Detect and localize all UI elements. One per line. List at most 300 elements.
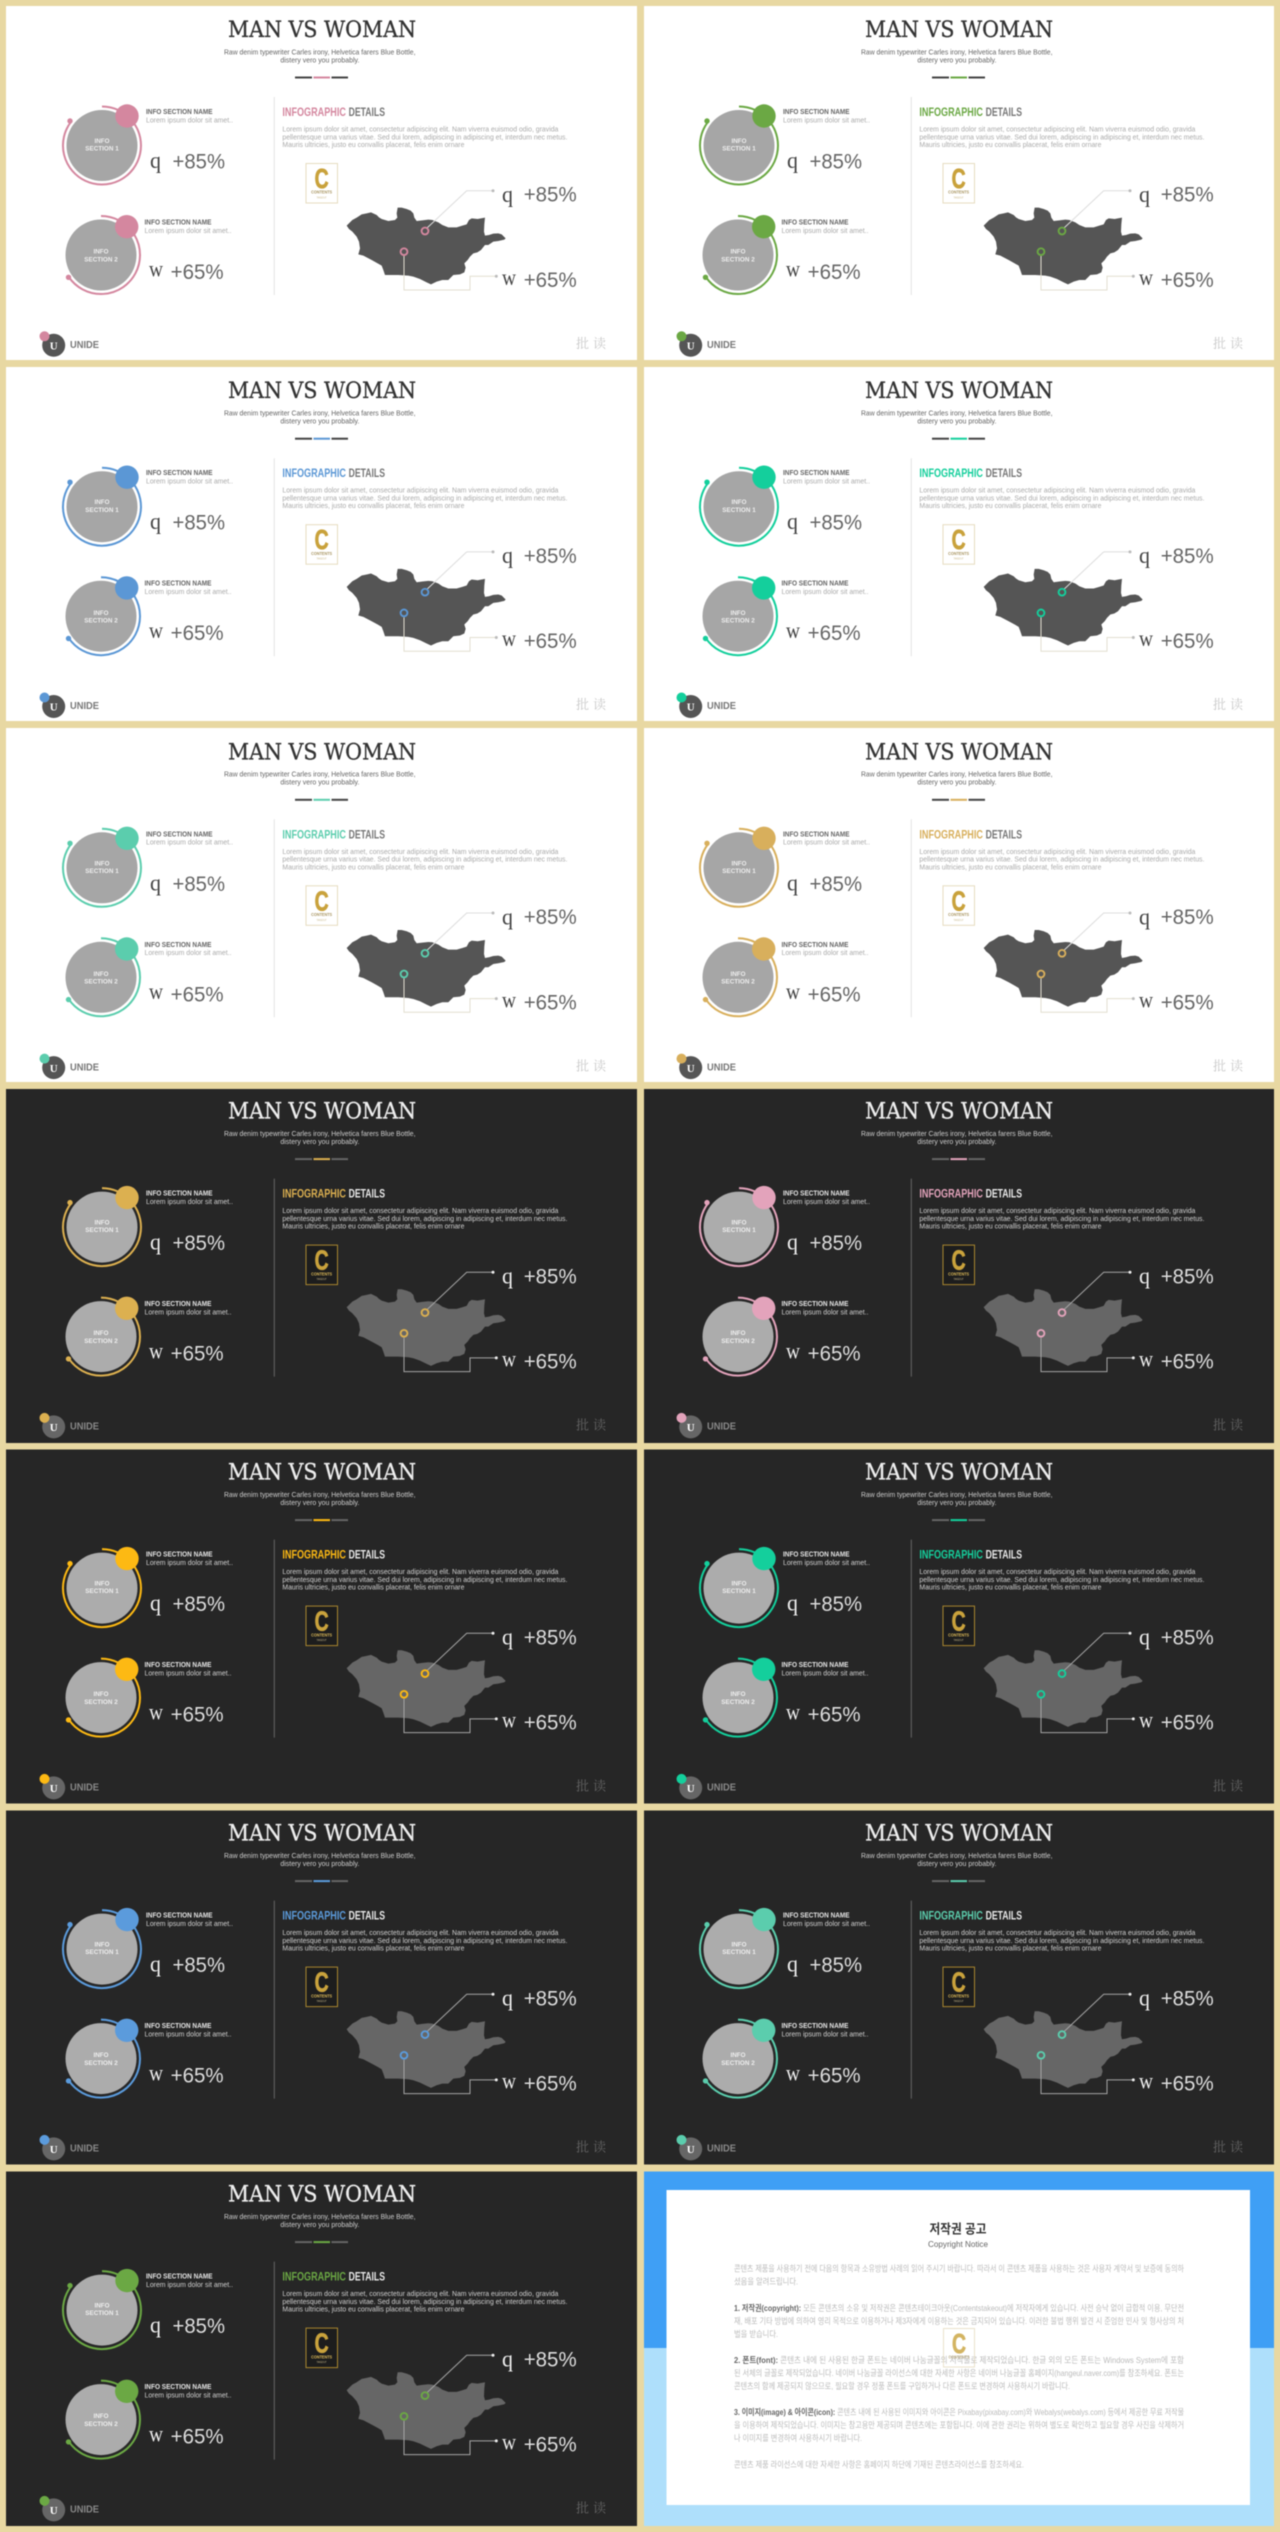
circle: info section 2: SECTION 2	[84, 1338, 118, 1345]
text: section 1 name: Lorem ipsum dolor sit amet..	[146, 838, 233, 847]
text: section 2 name	[782, 220, 868, 235]
stat: q +85%: q	[787, 148, 798, 173]
notice paragraph 1: 재, 배포 기타 방법에 의하여 영리 목적으로 이용하거나 제3자에게 이용하는 것은 금지되어 있습니다. 이러한 불법 행위 발견 시 준엄한 민사 및 형사상의 처	[734, 2316, 1184, 2326]
footer logo: unide: UNIDE	[70, 1783, 99, 1794]
map stat: w +65%: +65%	[524, 269, 577, 292]
panel: slide 9 yellow dark	[6, 1450, 637, 1804]
subtitle: Raw denim typewriter Carles irony, Helvetica farers Blue Bottle,	[861, 1490, 1052, 1499]
subtitle	[224, 770, 416, 787]
notice paragraph 1: 1. 저작권(copyright): 모든 콘텐츠의 소유 및 저작권은 콘텐츠테이크아웃(Contentstakeout)에 저작자에게 있습니다. 사전 승낙 없이 급합적 이용, 무단전	[734, 2303, 1184, 2313]
panel: slide 4 teal light	[644, 367, 1274, 721]
circle: info section 2	[66, 2380, 140, 2459]
circle: info section 2	[702, 576, 777, 655]
panel: slide 7 gold dark	[6, 1089, 637, 1443]
stat: q +85%: q	[787, 870, 798, 895]
body text	[919, 847, 1204, 871]
map with callouts	[347, 1271, 506, 1372]
map stat: w +65%: w	[1139, 1708, 1153, 1733]
heading: infographic details: DETAILS	[986, 1909, 1022, 1923]
circle: info section 2	[66, 215, 140, 294]
text: section 1 name: Lorem ipsum dolor sit amet..	[783, 115, 870, 124]
text: section 1 name	[783, 1552, 870, 1567]
subtitle: distery vero you probably.	[280, 1859, 359, 1868]
logo: contents: TAKEOUT	[954, 196, 964, 200]
subtitle: Raw denim typewriter Carles irony, Helvetica farers Blue Bottle,	[224, 47, 416, 56]
text: section 2 name	[782, 581, 868, 596]
stat: w +65%: +65%	[171, 2065, 224, 2088]
stat: w +65%: w	[786, 2060, 800, 2085]
divider bars	[295, 438, 348, 440]
footer glyphs: 批 读	[1213, 1415, 1243, 1434]
heading: infographic details: DETAILS	[986, 827, 1022, 841]
stat: q +85%	[150, 870, 225, 896]
map stat: w +65%: +65%	[524, 630, 577, 653]
circle: info section 1: SECTION 1	[722, 1588, 756, 1595]
circle: info section 2: SECTION 2	[721, 979, 755, 986]
notice paragraph 3: 3. 이미지(image) & 아이콘(icon): 콘텐츠 내에 된 사용된 이미지와 아이콘은 Pixabay(pixabay.com)와 Webalys(webalys.com) 등에서 제공한 무료 저작물	[734, 2407, 1184, 2417]
divider bars	[295, 799, 348, 801]
circle: info section 1: SECTION 1	[722, 868, 756, 875]
body text: Lorem ipsum dolor sit amet, consectetur adipiscing elit. Nam viverra euismod odio, gravida	[919, 847, 1195, 856]
stat: w +65%: w	[786, 1699, 800, 1724]
stat: w +65%: w	[149, 257, 163, 282]
stat: w +65%	[149, 2060, 224, 2088]
text: section 1 name: INFO SECTION NAME	[146, 1552, 213, 1559]
heading: infographic details: INFOGRAPHIC	[282, 105, 346, 119]
stat: w +65%: w	[149, 1699, 163, 1724]
stat: q +85%: q	[150, 148, 161, 173]
logo: contents: TAKEOUT	[317, 2360, 327, 2364]
body text	[919, 1567, 1204, 1592]
circle: info section 2: SECTION 2	[84, 1699, 118, 1706]
footer logo: unide: U	[687, 1422, 695, 1434]
circle: info section 1	[63, 466, 141, 546]
title: MAN VS WOMAN	[228, 2183, 416, 2208]
text: section 2 name: INFO SECTION NAME	[144, 581, 212, 588]
text: section 2 name	[782, 2023, 868, 2038]
footer logo: unide: UNIDE	[707, 340, 736, 351]
stat: w +65%: +65%	[808, 261, 861, 284]
footer logo: unide	[676, 692, 736, 718]
footer glyphs: 批 读	[1213, 1776, 1243, 1795]
subtitle: Raw denim typewriter Carles irony, Helvetica farers Blue Bottle,	[861, 409, 1052, 418]
body text: pellentesque urna varius vitae. Sed dui lorem, adipiscing in adipiscing et, interdum nec metus.	[919, 494, 1204, 503]
map with callouts	[984, 1271, 1143, 1372]
text: section 1 name	[783, 1191, 870, 1206]
text: section 1 name	[146, 1191, 233, 1206]
circle: info section 2	[66, 1658, 140, 1737]
map stat: w +65%	[502, 1347, 577, 1374]
circle: info section 2: INFO	[730, 1691, 746, 1698]
stat: q +85%	[787, 1591, 862, 1616]
circle: info section 2: SECTION 2	[84, 256, 118, 263]
logo: contents: CONTENTS	[311, 2354, 332, 2359]
heading: infographic details: INFOGRAPHIC	[919, 1909, 983, 1923]
circle: info section 2	[702, 1297, 777, 1376]
logo: contents	[943, 1606, 974, 1646]
circle: info section 2: SECTION 2	[721, 618, 755, 624]
logo: contents: C	[315, 163, 329, 194]
logo: contents: CONTENTS	[311, 1632, 332, 1637]
text: section 2 name: INFO SECTION NAME	[144, 1301, 212, 1308]
footer glyphs: 批 读	[1213, 333, 1243, 352]
stat: w +65%	[786, 2060, 861, 2088]
title: MAN VS WOMAN	[228, 1100, 416, 1125]
circle: info section 1: INFO	[94, 1581, 110, 1588]
map stat: q +85%: q	[1139, 904, 1150, 929]
panel: slide 1 pink light	[6, 6, 637, 360]
heading: infographic details: DETAILS	[349, 1909, 385, 1923]
circle: info section 2: SECTION 2	[84, 979, 118, 986]
title: MAN VS WOMAN	[865, 18, 1053, 43]
footer logo: unide: UNIDE	[70, 2505, 99, 2516]
footer logo: unide: UNIDE	[707, 701, 736, 712]
body text	[282, 847, 567, 871]
heading: infographic details: DETAILS	[986, 1187, 1022, 1201]
map stat: w +65%	[1139, 1708, 1214, 1735]
heading: infographic details: DETAILS	[986, 105, 1022, 119]
subtitle: Raw denim typewriter Carles irony, Helvetica farers Blue Bottle,	[224, 1490, 416, 1499]
heading: infographic details: INFOGRAPHIC	[282, 1187, 346, 1201]
text: section 2 name: Lorem ipsum dolor sit amet..	[782, 2029, 868, 2038]
text: section 2 name	[144, 2384, 232, 2399]
map stat: q +85%: +85%	[1161, 545, 1214, 568]
footer logo: unide: UNIDE	[707, 2144, 736, 2155]
text: section 1 name: INFO SECTION NAME	[783, 1913, 850, 1920]
body text: Mauris ultricies, justo eu convallis placerat, felis enim ornare	[919, 140, 1101, 149]
text: section 2 name: INFO SECTION NAME	[144, 220, 212, 226]
stat: w +65%: w	[786, 618, 800, 643]
panel: slide 13 green dark	[6, 2172, 637, 2526]
body text: pellentesque urna varius vitae. Sed dui lorem, adipiscing in adipiscing et, interdum nec metus.	[282, 1936, 567, 1945]
stat: q +85%: +85%	[172, 1593, 225, 1616]
circle: info section 1: SECTION 1	[85, 1227, 119, 1234]
map stat: w +65%: +65%	[524, 2434, 577, 2457]
footer glyphs: 批 读	[1213, 694, 1243, 713]
text: section 2 name	[782, 1662, 868, 1677]
logo: contents: CONTENTS	[948, 912, 969, 917]
footer glyphs: 批 读	[576, 694, 606, 713]
body text: Mauris ultricies, justo eu convallis placerat, felis enim ornare	[282, 862, 464, 871]
notice closing line: 콘텐츠 제품 라이선스에 대한 자세한 사항은 홈페이지 하단에 기재된 콘텐츠라이선스를 참조하세요.	[734, 2460, 1024, 2470]
logo: contents: TAKEOUT	[954, 918, 964, 922]
map with callouts	[347, 550, 506, 651]
logo: contents: TAKEOUT	[954, 1999, 964, 2003]
notice intro paragraph: 셨음을 알려드립니다.	[734, 2276, 798, 2286]
logo: contents: C	[315, 2328, 329, 2359]
subtitle: Raw denim typewriter Carles irony, Helvetica farers Blue Bottle,	[861, 770, 1052, 779]
heading: infographic details: DETAILS	[349, 2270, 385, 2284]
map stat: q +85%: q	[502, 182, 513, 207]
heading: infographic details: DETAILS	[349, 466, 385, 480]
footer logo: unide	[40, 331, 99, 357]
stat: q +85%: q	[787, 1591, 798, 1616]
circle: info section 1: INFO	[94, 499, 110, 506]
body text: Mauris ultricies, justo eu convallis placerat, felis enim ornare	[919, 501, 1101, 510]
footer logo: unide: U	[687, 340, 695, 352]
logo: contents: TAKEOUT	[317, 1638, 327, 1642]
logo: contents: CONTENTS	[311, 912, 332, 917]
text: section 1 name	[146, 1552, 233, 1567]
stat: q +85%: +85%	[810, 1954, 862, 1977]
circle: info section 1	[700, 466, 778, 546]
stat: w +65%	[786, 1338, 861, 1366]
divider bars	[295, 1158, 348, 1160]
map stat: w +65%: w	[502, 1708, 516, 1733]
circle: info section 1	[700, 827, 778, 907]
text: section 2 name: INFO SECTION NAME	[782, 220, 849, 226]
logo: contents: TAKEOUT	[317, 1999, 327, 2003]
subtitle	[861, 770, 1052, 787]
map stat: w +65%: +65%	[524, 991, 577, 1014]
text: section 1 name	[146, 109, 233, 124]
map stat: w +65%: +65%	[1161, 991, 1214, 1014]
footer logo: unide	[40, 2135, 99, 2160]
logo: contents	[943, 1967, 974, 2007]
circle: info section 2	[702, 2019, 777, 2098]
logo: contents: TAKEOUT	[954, 1277, 964, 1281]
circle: info section 1: INFO	[732, 860, 746, 867]
map stat: q +85%: +85%	[524, 1265, 577, 1288]
subtitle	[224, 1129, 416, 1146]
stat: q +85%: +85%	[810, 512, 862, 535]
text: section 2 name	[144, 581, 232, 596]
circle: info section 2: SECTION 2	[721, 2060, 755, 2067]
footer logo: unide: U	[50, 1063, 58, 1075]
text: section 2 name	[782, 1301, 868, 1316]
stat: w +65%	[149, 979, 224, 1006]
body text: Lorem ipsum dolor sit amet, consectetur adipiscing elit. Nam viverra euismod odio, gravida	[282, 1206, 558, 1215]
subtitle	[861, 1129, 1052, 1146]
logo: contents	[306, 163, 338, 203]
circle: info section 2: INFO	[730, 2052, 746, 2059]
map stat: w +65%	[1139, 626, 1214, 653]
subtitle: distery vero you probably.	[280, 2220, 359, 2229]
subtitle: Raw denim typewriter Carles irony, Helvetica farers Blue Bottle,	[224, 1851, 416, 1860]
subtitle: Raw denim typewriter Carles irony, Helvetica farers Blue Bottle,	[224, 2212, 416, 2221]
map stat: w +65%	[1139, 2069, 1214, 2096]
notice paragraph 2: 된 서체의 글꼴로 제작되었습니다. 네이버 나눔글꼴 라이선스에 대한 자세한 사항은 네이버 나눔글꼴 홈페이지(hangeul.naver.com)를 참조하세요. 폰트는	[734, 2368, 1184, 2378]
notice paragraph 2: 콘텐츠의 함께 제공되지 않으므로, 필요할 경우 정품 폰트를 구입하거나 다른 폰트로 변경하여 사용하시기 바랍니다.	[734, 2381, 1070, 2391]
panel: slide 2 green light	[644, 6, 1274, 360]
text: section 1 name	[783, 1913, 870, 1928]
map stat: w +65%: +65%	[1161, 1351, 1214, 1374]
logo: contents: TAKEOUT	[317, 196, 327, 200]
logo: contents	[943, 885, 974, 925]
title: MAN VS WOMAN	[865, 379, 1053, 404]
notice paragraph 1: 벌을 받습니다.	[734, 2329, 778, 2339]
text: section 1 name: INFO SECTION NAME	[783, 831, 850, 838]
heading: infographic details: INFOGRAPHIC	[919, 1548, 983, 1562]
circle: info section 2: SECTION 2	[721, 256, 755, 263]
footer logo: unide: UNIDE	[70, 2144, 99, 2155]
text: section 2 name: INFO SECTION NAME	[782, 1301, 849, 1308]
body text: Mauris ultricies, justo eu convallis placerat, felis enim ornare	[282, 1583, 464, 1592]
stat: w +65%: w	[786, 1338, 800, 1363]
footer logo: unide: U	[50, 2505, 58, 2517]
map stat: w +65%	[502, 987, 577, 1014]
circle: info section 1	[63, 1547, 141, 1627]
footer logo: unide: U	[687, 1783, 695, 1795]
divider bars	[932, 1880, 985, 1882]
text: section 2 name: INFO SECTION NAME	[782, 942, 849, 949]
divider bars	[932, 76, 985, 78]
map stat: w +65%	[502, 265, 577, 292]
subtitle: distery vero you probably.	[917, 55, 996, 64]
subtitle: Raw denim typewriter Carles irony, Helvetica farers Blue Bottle,	[861, 1129, 1052, 1138]
panel: slide 12 mint dark	[644, 1810, 1274, 2164]
text: section 2 name: Lorem ipsum dolor sit amet..	[782, 587, 868, 596]
divider bars	[932, 1519, 985, 1521]
text: section 1 name: INFO SECTION NAME	[783, 470, 850, 477]
map stat: q +85%: +85%	[524, 184, 577, 207]
footer logo: unide: U	[50, 340, 58, 352]
logo: contents	[943, 524, 974, 564]
logo: contents: C	[315, 885, 329, 916]
map stat: q +85%: q	[502, 2347, 513, 2372]
circle: info section 2: INFO	[730, 249, 746, 256]
circle: info section 1: INFO	[732, 1942, 746, 1949]
title: MAN VS WOMAN	[228, 740, 416, 765]
footer logo: unide: U	[687, 1063, 695, 1075]
map stat: q +85%	[502, 904, 577, 929]
footer logo: unide	[40, 692, 99, 718]
stat: w +65%	[149, 618, 224, 645]
body text: Lorem ipsum dolor sit amet, consectetur adipiscing elit. Nam viverra euismod odio, gravida	[919, 1567, 1195, 1576]
map stat: w +65%: w	[502, 1347, 516, 1372]
map stat: q +85%: +85%	[1161, 184, 1214, 207]
footer logo: unide: UNIDE	[70, 340, 99, 351]
stat: q +85%	[787, 148, 862, 174]
text: section 1 name: INFO SECTION NAME	[146, 1913, 213, 1920]
map stat: q +85%: +85%	[524, 906, 577, 929]
body text: Mauris ultricies, justo eu convallis placerat, felis enim ornare	[282, 2305, 464, 2314]
circle: info section 1	[63, 104, 141, 184]
stat: q +85%	[150, 1952, 225, 1977]
logo: contents: CONTENTS	[948, 1271, 969, 1276]
circle: info section 1	[63, 827, 141, 907]
logo: contents: C	[952, 885, 966, 916]
text: section 2 name: Lorem ipsum dolor sit amet..	[782, 1307, 868, 1316]
notice paragraph 3: 을 이용하여 제작되었습니다. 이미지는 참고용만 제공되며 콘텐츠에는 포함됩니다. 이에 관한 권리는 위하여 별도로 확인하고 필요할 경우 사진을 삭제하거	[734, 2420, 1184, 2430]
circle: info section 1	[63, 1186, 141, 1266]
circle: info section 2: INFO	[94, 971, 108, 978]
stat: w +65%: w	[149, 979, 163, 1004]
logo: contents	[306, 1967, 338, 2007]
stat: q +85%	[150, 1591, 225, 1616]
stat: w +65%: w	[149, 2060, 163, 2085]
circle: info section 2: INFO	[94, 1330, 108, 1337]
stat: w +65%	[149, 1699, 224, 1727]
body text	[282, 124, 567, 149]
notice paragraph 3	[734, 2407, 1184, 2443]
logo: contents: CONTENTS	[311, 1993, 332, 1998]
body text	[282, 1567, 567, 1592]
map stat: q +85%: q	[502, 1264, 513, 1289]
stat: q +85%	[150, 148, 225, 174]
stat: q +85%: +85%	[810, 150, 862, 174]
circle: info section 2: INFO	[94, 2052, 108, 2059]
map stat: w +65%: w	[1139, 626, 1153, 651]
map stat: w +65%: +65%	[1161, 630, 1214, 653]
map with callouts	[984, 550, 1143, 651]
circle: info section 2	[66, 937, 140, 1016]
subtitle: distery vero you probably.	[917, 778, 996, 787]
map stat: w +65%: w	[502, 626, 516, 651]
text: section 2 name: Lorem ipsum dolor sit amet..	[144, 1307, 232, 1316]
circle: info section 2: SECTION 2	[721, 1699, 755, 1706]
heading: infographic details: INFOGRAPHIC	[919, 105, 983, 119]
map stat: q +85%: +85%	[524, 1987, 577, 2010]
body text	[282, 1928, 567, 1953]
body text: pellentesque urna varius vitae. Sed dui lorem, adipiscing in adipiscing et, interdum nec metus.	[919, 1575, 1204, 1584]
stat: q +85%: +85%	[810, 1232, 862, 1255]
stat: w +65%	[786, 257, 861, 284]
text: section 2 name: Lorem ipsum dolor sit amet..	[144, 226, 232, 235]
body text: pellentesque urna varius vitae. Sed dui lorem, adipiscing in adipiscing et, interdum nec metus.	[919, 132, 1204, 141]
title: MAN VS WOMAN	[865, 1100, 1053, 1125]
logo: contents: TAKEOUT	[317, 557, 327, 561]
map stat: q +85%: q	[502, 1625, 513, 1650]
body text: pellentesque urna varius vitae. Sed dui lorem, adipiscing in adipiscing et, interdum nec metus.	[919, 1936, 1204, 1945]
stat: w +65%	[149, 1338, 224, 1366]
logo: contents: CONTENTS	[948, 1632, 969, 1637]
text: section 1 name: INFO SECTION NAME	[146, 831, 213, 838]
body text: Lorem ipsum dolor sit amet, consectetur adipiscing elit. Nam viverra euismod odio, gravida	[282, 1928, 558, 1937]
text: section 1 name: INFO SECTION NAME	[146, 109, 213, 116]
body text: Lorem ipsum dolor sit amet, consectetur adipiscing elit. Nam viverra euismod odio, gravida	[919, 1928, 1195, 1937]
text: section 1 name: Lorem ipsum dolor sit amet..	[146, 1558, 233, 1567]
divider bars	[295, 2241, 348, 2243]
circle: info section 2: SECTION 2	[84, 618, 118, 624]
stat: q +85%: q	[150, 1952, 161, 1977]
text: section 1 name: Lorem ipsum dolor sit amet..	[783, 1919, 870, 1928]
panel: slide 10 teal dark	[644, 1450, 1274, 1804]
map stat: q +85%: +85%	[524, 2348, 577, 2371]
logo: contents: CONTENTS	[948, 551, 969, 556]
text: section 1 name: Lorem ipsum dolor sit amet..	[146, 2280, 233, 2289]
circle: info section 2	[702, 937, 777, 1016]
heading: infographic details: DETAILS	[986, 1548, 1022, 1562]
circle: info section 1	[63, 1908, 141, 1988]
text: section 1 name	[146, 1913, 233, 1928]
circle: info section 2	[66, 576, 140, 655]
map stat: w +65%: +65%	[1161, 2073, 1214, 2096]
subtitle	[861, 1490, 1052, 1507]
circle: info section 2: SECTION 2	[84, 2060, 118, 2067]
circle: info section 2: SECTION 2	[721, 1338, 755, 1345]
map stat: q +85%	[1139, 904, 1214, 929]
map with callouts	[347, 2354, 506, 2455]
text: section 1 name	[146, 2274, 233, 2289]
notice paragraph 2	[734, 2355, 1184, 2391]
logo: contents: CONTENTS	[948, 190, 969, 195]
map stat: q +85%	[1139, 543, 1214, 568]
text: section 2 name	[144, 1662, 232, 1677]
subtitle: Raw denim typewriter Carles irony, Helvetica farers Blue Bottle,	[861, 47, 1052, 56]
text: section 1 name: Lorem ipsum dolor sit amet..	[783, 1558, 870, 1567]
subtitle	[224, 1490, 416, 1507]
circle: info section 1: SECTION 1	[85, 868, 119, 875]
map stat: q +85%: +85%	[524, 545, 577, 568]
footer glyphs: 批 读	[576, 333, 606, 352]
text: section 1 name: INFO SECTION NAME	[783, 1191, 850, 1198]
map with callouts	[984, 1993, 1143, 2094]
map stat: w +65%	[1139, 265, 1214, 292]
text: section 1 name: Lorem ipsum dolor sit amet..	[146, 1919, 233, 1928]
stat: q +85%	[150, 2313, 225, 2338]
logo: contents	[306, 1606, 338, 1646]
